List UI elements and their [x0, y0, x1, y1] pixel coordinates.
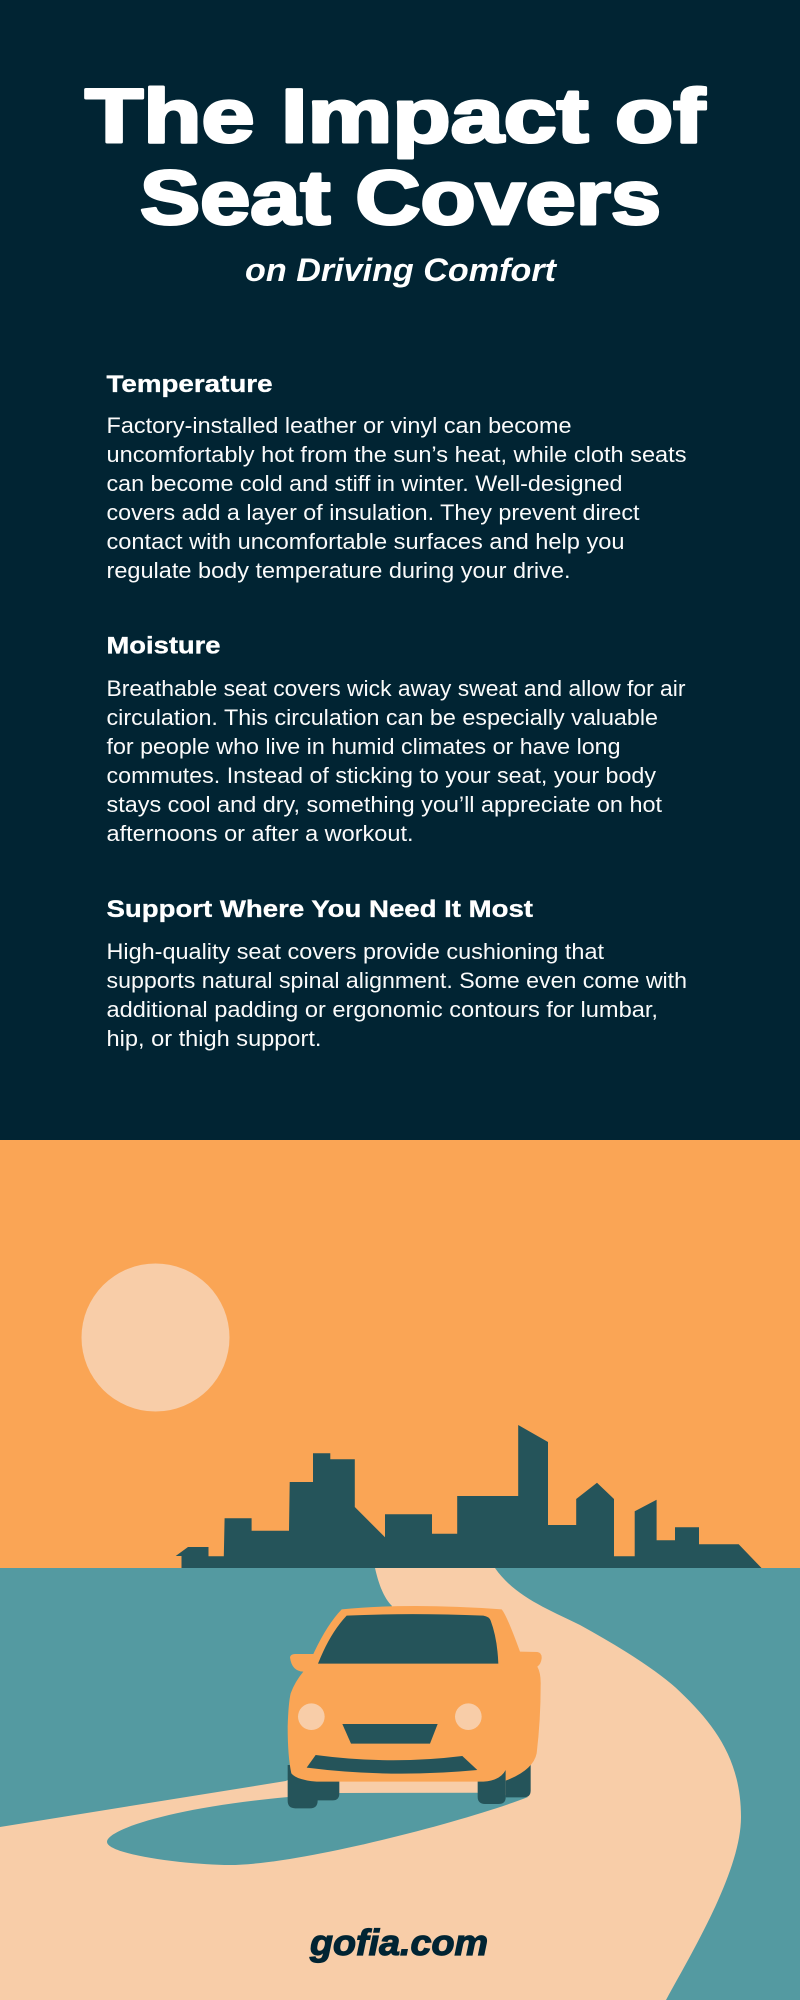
ground — [0, 1568, 800, 2000]
text block: moisture: stays cool and dry, something you’ll appreciate on hot — [106, 792, 662, 817]
text block: support: High-quality seat covers provide cushioning that — [106, 939, 604, 964]
icon: car — [288, 1606, 542, 1808]
panel: dark text background — [0, 0, 800, 1140]
text block: moisture: circulation. This circulation can be especially valuable — [106, 705, 658, 730]
text block: support: additional padding or ergonomic contours for lumbar, — [106, 997, 658, 1022]
text block: moisture: Breathable seat covers wick away sweat and allow for air — [106, 676, 686, 701]
text block: temperature: regulate body temperature during your drive. — [106, 558, 570, 583]
car body — [288, 1606, 542, 1782]
text block: temperature: contact with uncomfortable surfaces and help you — [106, 529, 624, 554]
text block: temperature: covers add a layer of insulation. They prevent direct — [106, 500, 640, 525]
panel: illustration scene — [0, 1140, 800, 2000]
text block: support: hip, or thigh support. — [106, 1026, 322, 1051]
heading: temperature: Temperature — [106, 371, 272, 398]
car grille — [342, 1724, 438, 1744]
text block: temperature: Factory-installed leather or vinyl can become — [106, 413, 572, 438]
title: Seat Covers — [140, 156, 661, 241]
car wheels — [288, 1763, 531, 1808]
road inner teal island — [107, 1793, 528, 1865]
website url: gofia.com — [309, 1922, 488, 1963]
sun — [82, 1264, 230, 1412]
text block: support — [106, 939, 687, 1051]
text block: moisture: commutes. Instead of sticking to your seat, your body — [106, 763, 656, 788]
text block: moisture: afternoons or after a workout. — [106, 821, 414, 846]
title — [85, 74, 706, 241]
text block: temperature: uncomfortably hot from the sun’s heat, while cloth seats — [106, 442, 686, 467]
title: The Impact of — [85, 74, 706, 159]
text block: moisture — [106, 676, 686, 846]
text block: temperature: can become cold and stiff in winter. Well-designed — [106, 471, 622, 496]
section: support — [106, 896, 687, 1051]
text block: moisture: for people who live in humid climates or have long — [106, 734, 620, 759]
city skyline — [176, 1425, 761, 1568]
subtitle: on Driving Comfort — [245, 252, 557, 288]
car bumper — [307, 1755, 477, 1774]
text block: support: supports natural spinal alignment. Some even come with — [106, 968, 687, 993]
section: temperature — [106, 371, 686, 583]
road — [0, 1568, 741, 2000]
heading: support: Support Where You Need It Most — [106, 896, 533, 923]
car windshield — [318, 1614, 498, 1664]
car headlights — [298, 1703, 482, 1730]
section: moisture — [106, 632, 686, 846]
text block: temperature — [106, 413, 686, 583]
sky — [0, 1140, 800, 1568]
heading: moisture: Moisture — [106, 632, 220, 660]
